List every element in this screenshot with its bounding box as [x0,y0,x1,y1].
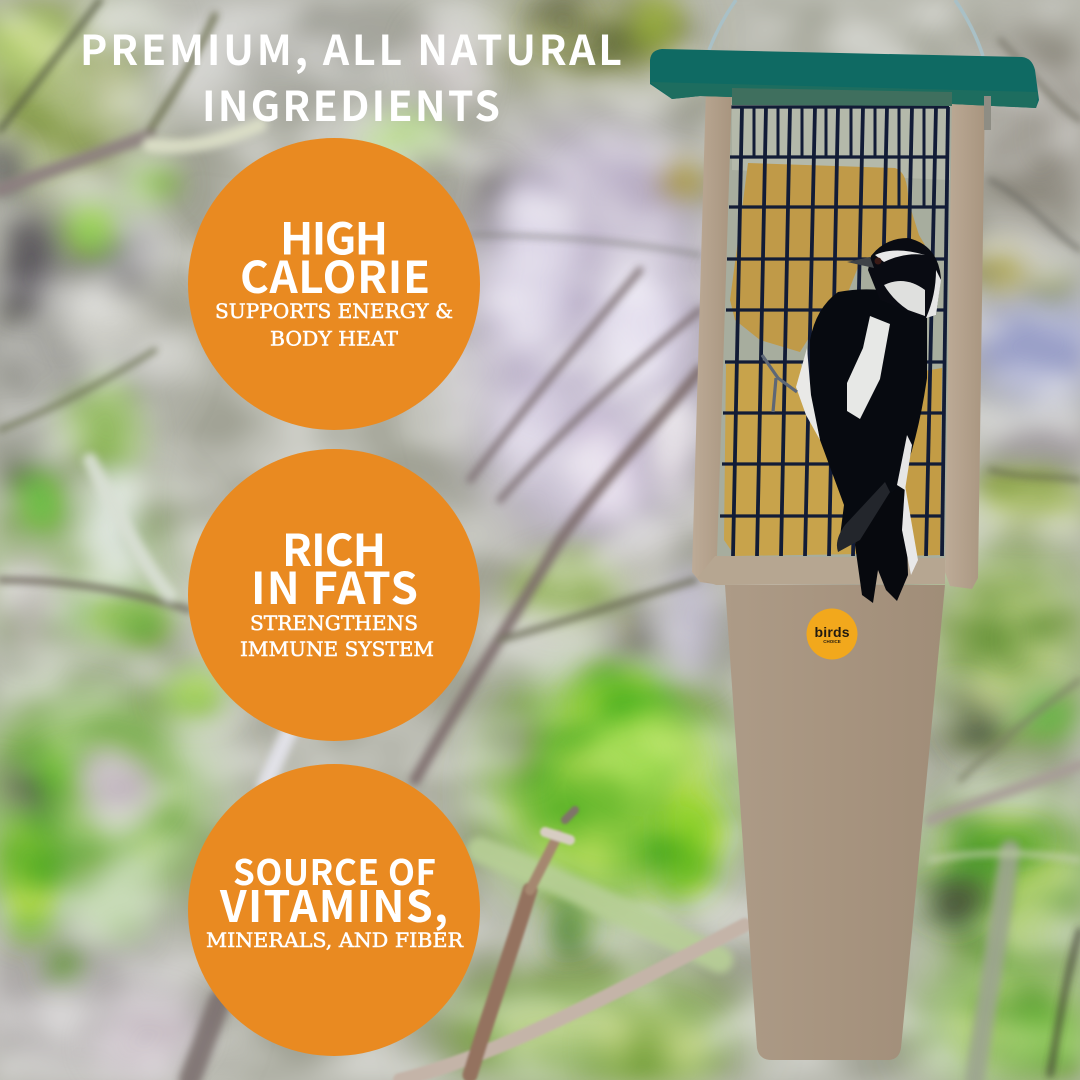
left post [692,88,732,584]
white back patch [847,316,890,419]
circle: rich in fats: IMMUNE SYSTEM [240,637,434,661]
title: INGREDIENTS [202,73,500,133]
circle: high calorie [188,138,480,430]
circle: source of vitamins: MINERALS, AND FIBER [206,928,464,952]
title: PREMIUM, ALL NATURAL [80,17,622,77]
brand badge: CHOICE [823,639,841,644]
circle: source of vitamins: VITAMINS, [219,873,448,935]
brand badge [806,608,858,660]
body [810,289,927,552]
tail [855,480,908,603]
circle: source of vitamins [188,764,480,1056]
circle: source of vitamins: SOURCE OF [233,845,436,896]
metal hinge [984,96,991,130]
tail prop pole [725,585,945,1060]
roof [650,49,1039,108]
circle: rich in fats: IN FATS [251,553,418,617]
woodpecker [762,238,941,603]
hanger wire [709,0,983,56]
right post [945,92,985,589]
beak [847,257,874,268]
circle: rich in fats: STRENGTHENS [250,611,418,635]
title [80,17,622,133]
bottom sill [697,556,945,585]
circle: high calorie: CALORIE [240,242,430,306]
foreground twig [400,810,745,1080]
brand badge: birds [814,624,850,640]
suet cakes [724,163,942,556]
foot [762,355,797,412]
circle: high calorie: SUPPORTS ENERGY & [215,299,453,323]
cage interior [712,92,955,560]
bird feeder [650,0,1039,1060]
circle: rich in fats: RICH [282,515,386,579]
circle: high calorie: BODY HEAT [270,326,399,350]
white flank [796,348,820,440]
circle: high calorie: HIGH [280,204,388,268]
circle: rich in fats [188,449,480,741]
wire grid [720,107,949,556]
head [868,238,941,318]
